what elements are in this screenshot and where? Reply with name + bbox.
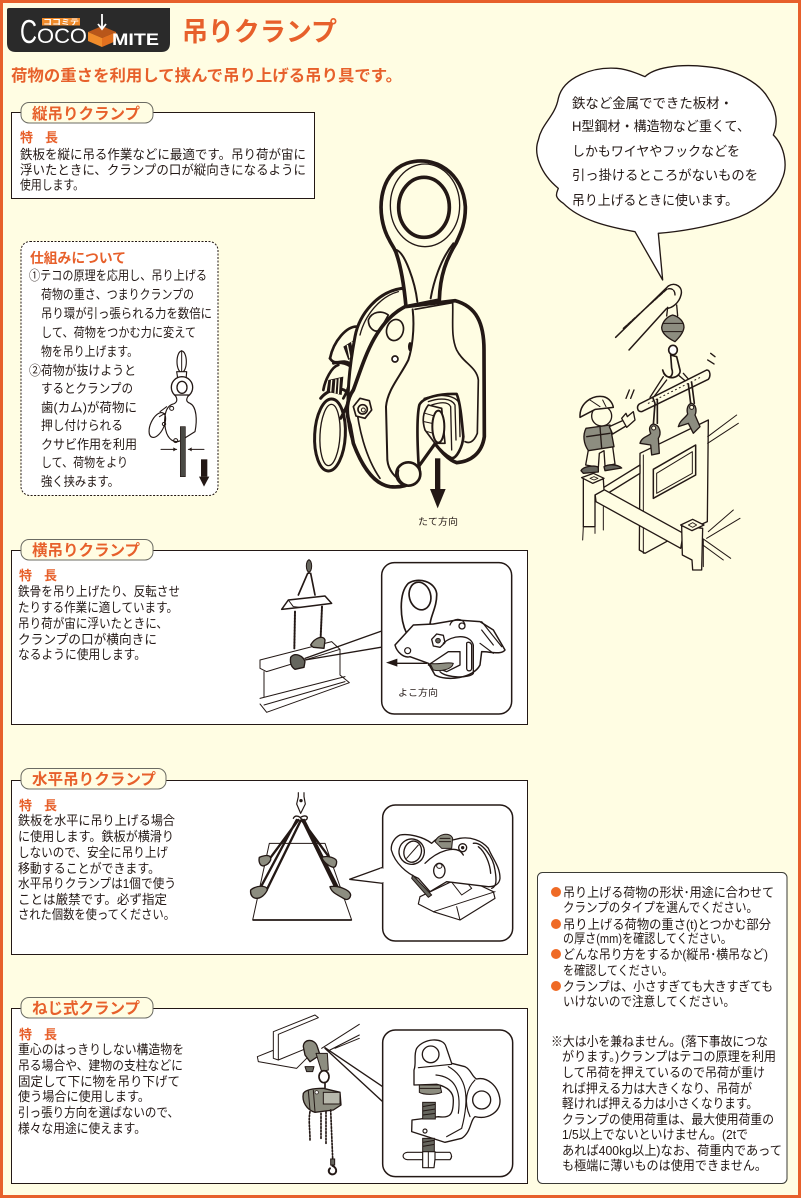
text block: mechanism explanation: 吊り環が引っ張られる力を数倍に — [41, 306, 212, 321]
illustration: vertical clamp — [313, 161, 484, 508]
plate load — [639, 420, 708, 553]
arrow: horizontal direction — [395, 661, 427, 665]
logo: COCOMITE — [7, 8, 170, 52]
text block: 特長: 引っ張り方向を選ばないので、 — [18, 1105, 179, 1120]
inset: horizontal clamp — [382, 563, 512, 714]
text block: mechanism explanation: 歯(カム)が荷物に — [41, 400, 137, 415]
bullet list: の厚さ(mm)を確認してください。 — [563, 931, 732, 946]
text block: 特長: たりする作業に適しています。 — [18, 600, 178, 615]
text block: mechanism explanation — [29, 268, 212, 489]
logo: COCOMITE: ココミテ — [43, 18, 79, 26]
text block: bubble text — [572, 96, 758, 208]
text block: caution note: 軽ければ押える力は小さくなります。 — [562, 1096, 758, 1111]
worker — [580, 396, 635, 473]
text block: 特長: 特 長 — [19, 568, 57, 583]
heading: 水平吊りクランプ: 水平吊りクランプ — [32, 770, 156, 788]
logo: COCOMITE: MITE — [112, 30, 159, 49]
inset pointer — [325, 1048, 383, 1102]
text block: caution note: 1/5以上でないといけません。(2tで — [562, 1127, 748, 1142]
clamp front body — [347, 301, 484, 487]
text block: bubble text: H型鋼材・構造物など重くて、 — [572, 119, 750, 134]
bullet list — [551, 885, 774, 1009]
bullet list: 吊り上げる荷物の重さ(t)とつかむ部分 — [563, 917, 771, 932]
text block: bubble text: しかもワイヤやフックなどを — [572, 144, 740, 159]
heading: 縦吊りクランプ — [21, 102, 153, 123]
text block: 特長 — [18, 798, 176, 922]
bullet list: どんな吊り方をするか(縦吊･横吊など) — [563, 947, 768, 962]
bullet list: クランプは、小さすぎても大きすぎても — [563, 979, 773, 994]
text block: 特長: ことは厳禁です。必ず指定 — [18, 892, 167, 907]
toggle knob — [396, 462, 420, 486]
text block: 特長: 鉄板を縦に吊る作業などに最適です。吊り荷が宙に — [20, 147, 306, 162]
subtitle: 荷物の重さを利用して挟んで吊り上げる吊り具です。 — [11, 67, 402, 85]
text block: mechanism explanation: して、荷物をより — [41, 455, 128, 470]
text block: mechanism explanation: クサビ作用を利用 — [41, 437, 137, 452]
panel: 横吊りクランプ — [12, 540, 528, 724]
text block: 特長: 使用します。 — [20, 178, 84, 192]
text block: caution note: れば押える力は大きくなり、吊荷が — [562, 1081, 752, 1096]
text block: bubble text: 吊り上げるときに使います。 — [572, 192, 738, 208]
text block: 特長: 鉄骨を吊り上げたり、反転させ — [18, 584, 180, 599]
panel: 縦吊りクランプ — [12, 102, 314, 198]
text block: 特長: 吊る場合や、建物の支柱などに — [18, 1058, 183, 1073]
clamp back plate — [348, 288, 440, 478]
text block: mechanism explanation: ②荷物が抜けようと — [29, 363, 136, 378]
icon: small clamp diagram — [146, 351, 209, 487]
text block: caution note: も極端に薄いものは使用できません。 — [562, 1157, 767, 1173]
text block: 特長: 重心のはっきりしない構造物を — [18, 1042, 184, 1057]
inset pointer — [305, 631, 381, 660]
pulley block — [662, 315, 684, 378]
heading: 縦吊りクランプ: 縦吊りクランプ — [32, 105, 140, 123]
heading: 横吊りクランプ — [21, 540, 153, 560]
text block: 特長: 特 長 — [19, 798, 57, 813]
text block: bubble text: 鉄など金属でできた板材・ — [572, 96, 733, 111]
chain and oval ring — [313, 327, 367, 472]
text block: 特長: に使用します。鉄板が横滑り — [18, 829, 174, 844]
text block: 特長: 特 長 — [20, 130, 58, 145]
logo: COCOMITE: OCO — [37, 25, 87, 48]
text block: mechanism explanation: 押し付けられる — [41, 418, 123, 433]
panel: selection notes — [538, 872, 787, 1184]
panel: 仕組みについて — [21, 242, 218, 496]
jaw mouth — [417, 394, 463, 466]
heading: 横吊りクランプ: 横吊りクランプ — [32, 540, 140, 560]
inset: horizontal-lift clamp — [349, 805, 513, 941]
text block: caution note: あれば400kg以上)なお、荷重内であって — [562, 1143, 782, 1158]
text block: mechanism explanation: 荷物の重さ、つまりクランプの — [41, 287, 194, 302]
arrow: vertical direction — [430, 458, 446, 508]
heading: 仕組みについて: 仕組みについて — [30, 250, 126, 266]
text block: 特長: クランプの口が横向きに — [18, 632, 157, 647]
illustration: hoist on beam — [257, 1015, 383, 1174]
text block: 特長: 固定して下に物を吊り下げて — [18, 1074, 180, 1089]
text block: caution note: して吊荷を押えているので吊荷が重け — [562, 1065, 765, 1080]
label: よこ方向: よこ方向 — [398, 687, 438, 699]
crane boom — [616, 284, 681, 350]
text block: 特長: 鉄板を水平に吊り上げる場合 — [18, 813, 175, 828]
text block: mechanism explanation: するとクランプの — [41, 381, 133, 396]
text block: 特長: なるように使用します。 — [18, 647, 146, 662]
logo: COCOMITE: C — [20, 13, 37, 50]
text block: 特長: 浮いたときに、クランプの口が縦向きになるように — [20, 162, 306, 178]
illustration: crane scene — [580, 284, 740, 570]
inset: screw clamp — [383, 1030, 513, 1177]
text block: 特長 — [20, 130, 306, 192]
panel: 水平吊りクランプ — [12, 768, 528, 954]
text block: 特長 — [18, 1027, 184, 1136]
clamps — [640, 403, 700, 455]
text block: mechanism explanation: ①テコの原理を応用し、吊り上げる — [29, 268, 207, 283]
text block: 特長: された個数を使ってください。 — [18, 907, 175, 922]
text block: caution note: がります。)クランプはテコの原理を利用 — [562, 1049, 776, 1064]
bullet list: を確認してください。 — [563, 963, 673, 978]
text block: mechanism explanation: 物を吊り上げます。 — [41, 344, 138, 359]
illustration: I-beam lifting — [260, 560, 381, 712]
text block: caution note: クランプの使用荷重は、最大使用荷重の — [562, 1111, 774, 1127]
title: 吊りクランプ — [182, 17, 337, 47]
illustration: plate lifting with four clamps — [251, 793, 352, 920]
text block: mechanism explanation: して、荷物をつかむ力に変えて — [41, 325, 196, 340]
text block: 特長: 特 長 — [19, 1027, 57, 1042]
label: たて方向: たて方向 — [418, 516, 458, 528]
text block: caution note: ※大は小を兼ねません。(落下事故につな — [551, 1034, 768, 1049]
text block: 特長: 移動することができます。 — [18, 861, 160, 876]
bullet list: 吊り上げる荷物の形状･用途に合わせて — [563, 885, 774, 900]
speech bubble — [537, 66, 785, 280]
lifting eye — [381, 161, 465, 307]
text block: 特長 — [18, 568, 180, 662]
spreader beam — [626, 353, 715, 425]
hex bolt — [353, 398, 372, 418]
heading: ねじ式クランプ — [21, 998, 153, 1018]
text block: bubble text: 引っ掛けるところがないものを — [572, 168, 758, 183]
bullet list: クランプのタイプを選んでください。 — [563, 900, 758, 915]
text block: 特長: しないので、安全に吊り上げ — [18, 845, 168, 860]
frame beams — [582, 415, 740, 570]
text block: caution note — [551, 1034, 782, 1173]
bullet list: いけないので注意してください。 — [563, 994, 735, 1009]
text block: 特長: 様々な用途に使えます。 — [18, 1121, 146, 1136]
heading: ねじ式クランプ: ねじ式クランプ — [32, 1000, 140, 1018]
text block: 特長: 水平吊りクランプは1個で使う — [18, 876, 176, 891]
text block: mechanism explanation: 強く挟みます。 — [41, 474, 119, 489]
panel: ねじ式クランプ — [12, 998, 528, 1184]
text block: 特長: 吊り荷が宙に浮いたときに、 — [18, 616, 168, 631]
text block: 特長: 使う場合に使用します。 — [18, 1089, 150, 1104]
